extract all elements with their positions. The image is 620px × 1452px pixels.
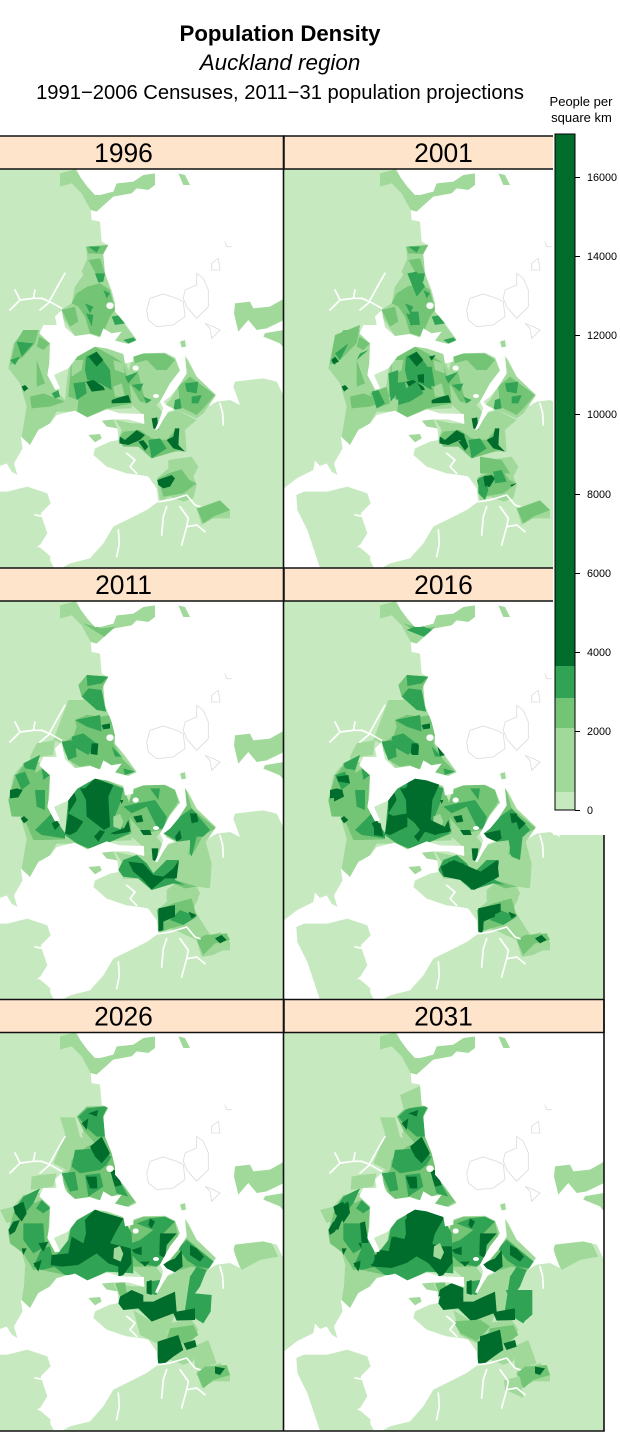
subtitle: Auckland region [198, 50, 360, 75]
year strips [0, 136, 604, 1032]
legend ticks [575, 178, 580, 810]
legend tick labels: 2000 [587, 726, 611, 738]
legend: people per square km [550, 94, 617, 817]
legend tick labels: 4000 [587, 647, 611, 659]
legend tick labels: 0 [587, 805, 593, 817]
legend tick labels [587, 172, 617, 817]
legend tick labels: 10000 [587, 409, 617, 421]
data source line: 1991−2006 Censuses, 2011−31 population projections [36, 82, 524, 104]
legend tick labels: 12000 [587, 330, 617, 342]
year strips: 2001 [414, 138, 473, 168]
title: Population Density [180, 21, 381, 46]
legend heading: square km [551, 110, 612, 125]
legend tick labels: 6000 [587, 568, 611, 580]
year strips: 2031 [414, 1002, 473, 1032]
panel: 1996 map [0, 163, 284, 573]
year strips: 1996 [94, 138, 153, 168]
legend heading: People per [550, 94, 613, 109]
legend background [553, 0, 620, 835]
year strips: 2016 [414, 570, 473, 600]
legend tick labels: 8000 [587, 489, 611, 501]
year strips: 2011 [95, 570, 152, 600]
panel: 2001 map [284, 170, 553, 568]
panel: 2031 map [284, 1026, 604, 1436]
legend tick labels: 16000 [587, 172, 617, 184]
legend tick labels: 14000 [587, 251, 617, 263]
panel: 2016 map [284, 595, 604, 1005]
panel: 2011 map [0, 595, 284, 1005]
legend colour bar [555, 134, 575, 810]
panel: 2026 map [0, 1026, 284, 1436]
year strips: 2026 [94, 1002, 153, 1032]
